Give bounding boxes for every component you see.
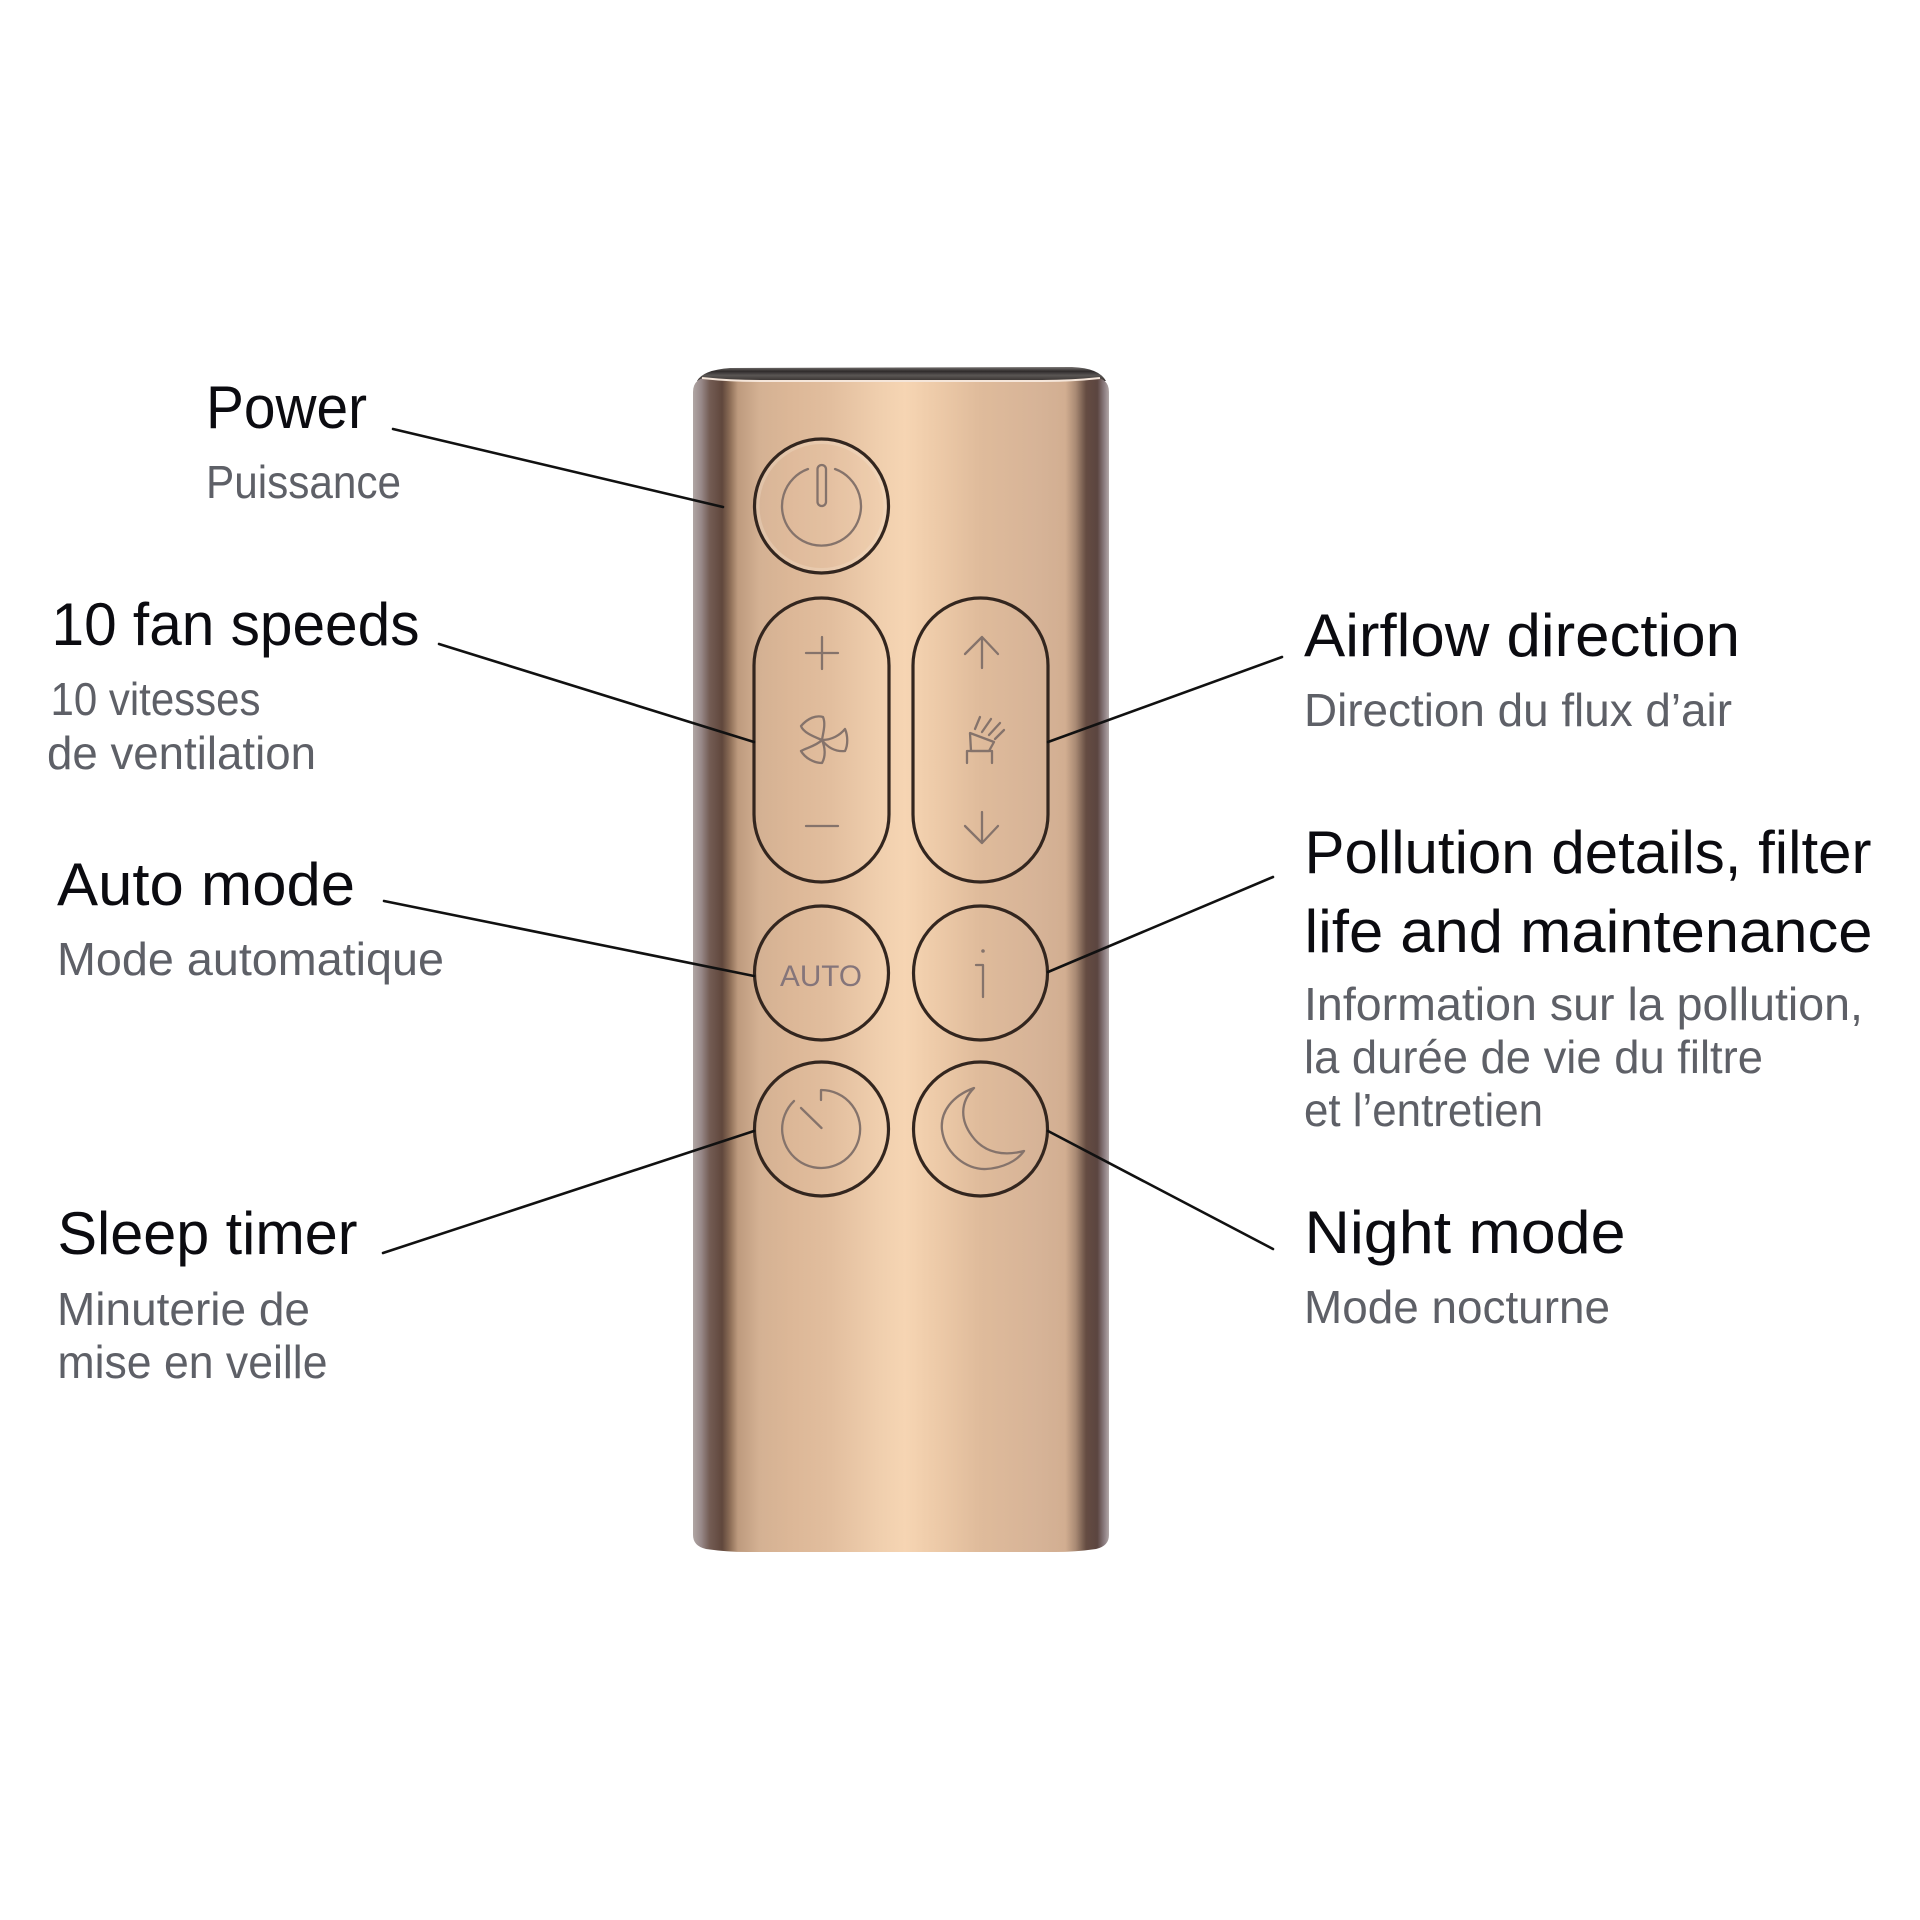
label: night mode [1304, 1199, 1626, 1333]
label: auto mode [57, 851, 444, 985]
night mode button [914, 1062, 1048, 1196]
label: fan speeds: 10 vitesses [50, 673, 260, 725]
icon: minus [806, 825, 838, 827]
power button [754, 439, 888, 573]
label: airflow direction: Direction du flux d’air [1304, 684, 1732, 736]
front top edge highlight [702, 378, 1100, 381]
label: fan speeds [47, 591, 420, 779]
icon: plus [806, 637, 838, 669]
label: airflow direction [1304, 602, 1740, 736]
label: night mode: Mode nocturne [1304, 1281, 1610, 1333]
label: night mode: Night mode [1304, 1199, 1626, 1266]
label: auto mode: Auto mode [57, 851, 355, 918]
label: pollution details: Pollution details, filter [1304, 819, 1872, 886]
icon: power symbol [782, 465, 861, 546]
icon: fan [801, 716, 847, 763]
label: AUTO: AUTO [780, 960, 862, 993]
label: pollution details: et l’entretien [1304, 1084, 1543, 1136]
remote control body [693, 367, 1109, 1552]
icon: airflow lamp [967, 717, 1004, 763]
leader lines [383, 429, 1282, 1253]
label: fan speeds: 10 fan speeds [52, 591, 420, 658]
sleep timer button [754, 1062, 888, 1196]
label: pollution details: life and maintenance [1304, 898, 1872, 965]
label: sleep timer: mise en veille [58, 1336, 328, 1388]
label: pollution details: Information sur la pollution, [1304, 978, 1863, 1030]
icon: timer [782, 1090, 860, 1168]
icon: moon [942, 1088, 1024, 1169]
top rim opening [697, 367, 1106, 381]
icon: info i [976, 949, 985, 997]
label: fan speeds: de ventilation [47, 727, 316, 779]
label: power: Power [206, 374, 367, 441]
metal body [693, 378, 1109, 1552]
label: power: Puissance [206, 456, 401, 508]
information button [914, 906, 1048, 1040]
label: airflow direction: Airflow direction [1304, 602, 1740, 669]
icon: arrow up [965, 637, 998, 668]
auto button [754, 906, 888, 1040]
label: auto mode: Mode automatique [57, 933, 444, 985]
label: sleep timer: Sleep timer [58, 1200, 358, 1267]
label: pollution details: la durée de vie du filtre [1304, 1031, 1763, 1083]
label: pollution details [1304, 819, 1872, 1136]
label: sleep timer [57, 1200, 358, 1388]
icon: arrow down [965, 812, 998, 843]
airflow direction button [913, 598, 1048, 882]
label: power [206, 374, 401, 508]
fan speed button [754, 598, 889, 882]
label: sleep timer: Minuterie de [57, 1283, 310, 1335]
